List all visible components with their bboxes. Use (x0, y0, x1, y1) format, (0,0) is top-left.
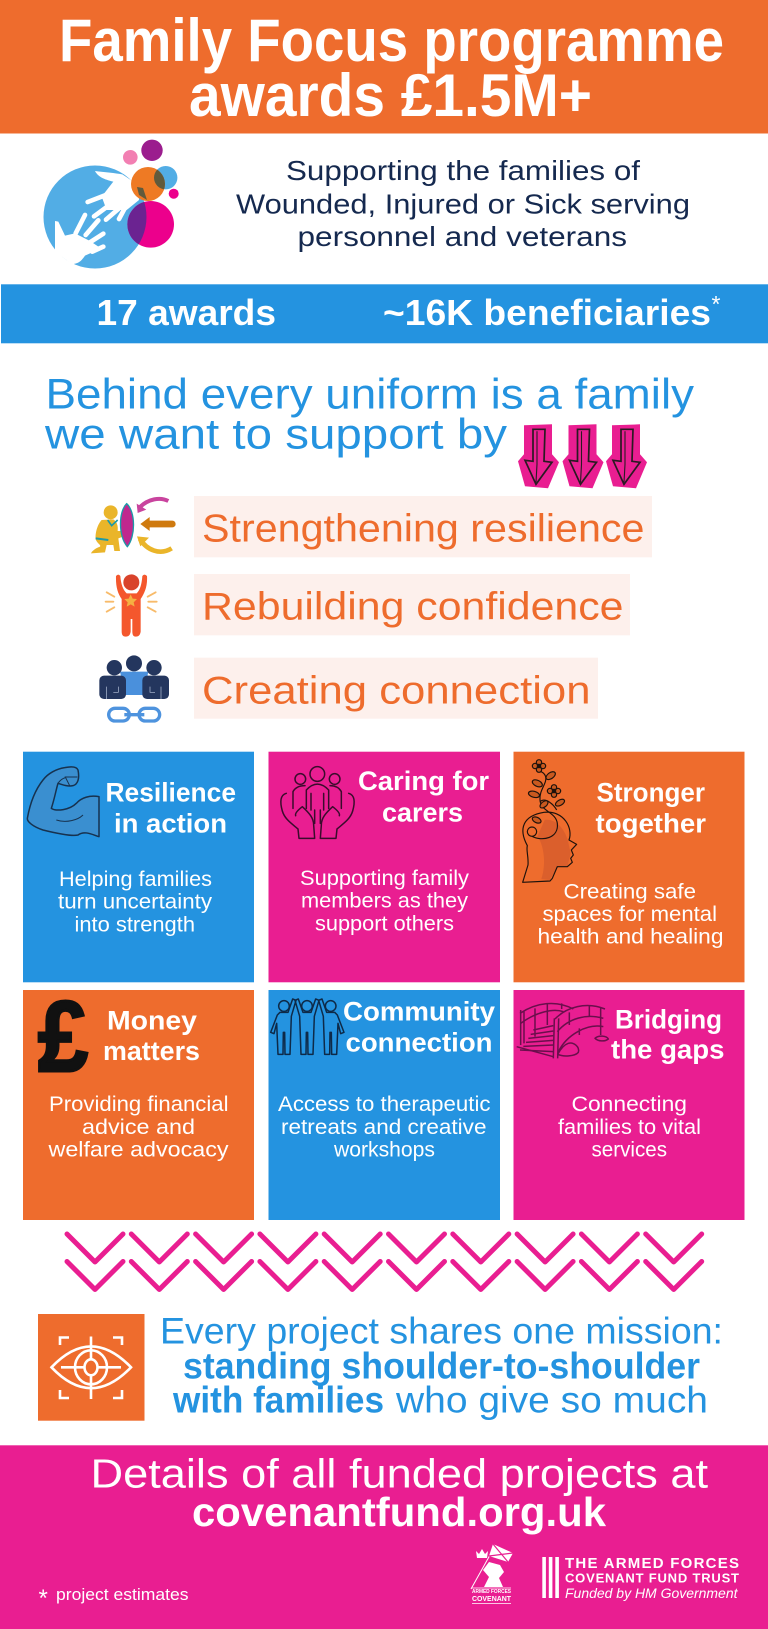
heading: connection (346, 1028, 492, 1058)
subtitle text: Supporting the families of (286, 155, 640, 186)
mission statement: who give so much (395, 1379, 708, 1420)
panel: bridging the gaps (514, 990, 744, 1220)
label: creating connection (194, 658, 598, 719)
call to action: Details of all funded projects at (90, 1450, 709, 1496)
chevrons divider (67, 1234, 702, 1290)
stat: awards: 17 awards (96, 292, 276, 333)
description: Access to therapeutic (278, 1093, 490, 1116)
label: strengthening resilience: Strengthening resilience (202, 508, 644, 551)
icon: hands holding people (281, 767, 354, 838)
title (59, 7, 724, 129)
description: into strength (74, 914, 195, 937)
subtitle text (236, 155, 690, 252)
footer panel (0, 1445, 768, 1629)
panel: stronger together (514, 752, 744, 982)
description: support others (315, 913, 454, 936)
intro heading: Behind every uniform is a family (46, 370, 695, 418)
heading (596, 778, 706, 839)
mission statement: with families (172, 1379, 384, 1420)
description: Providing financial (49, 1093, 228, 1116)
heading: Bridging (615, 1004, 722, 1034)
mission statement: standing shoulder-to-shoulder (183, 1345, 700, 1386)
description: retreats and creative (281, 1116, 486, 1139)
heading (343, 997, 495, 1058)
subtitle text: Wounded, Injured or Sick serving (236, 188, 690, 219)
icon: pound sign: £ (38, 981, 88, 1093)
intro heading (44, 370, 695, 458)
heading: matters (103, 1036, 200, 1066)
title: awards £1.5M+ (189, 62, 592, 129)
logo: armed forces covenant fund trust (542, 1555, 739, 1601)
logo: armed forces covenant (471, 1544, 513, 1604)
description (558, 1093, 701, 1162)
icon: flexed arm (27, 767, 99, 837)
intro heading: we want to support by (44, 410, 508, 458)
heading: Stronger (596, 778, 705, 808)
heading (103, 1005, 200, 1066)
heading: Caring for (358, 766, 489, 796)
call to action: covenantfund.org.uk (192, 1489, 606, 1535)
logo: armed forces covenant fund trust: COVENANT FUND TRUST (565, 1571, 739, 1586)
heading (611, 1004, 724, 1064)
subtitle text: personnel and veterans (298, 221, 627, 252)
description (300, 867, 470, 936)
panel: community connection (268, 990, 500, 1220)
description (47, 1093, 229, 1162)
heading: together (596, 809, 706, 839)
logo: armed forces covenant: ARMED FORCES (472, 1589, 512, 1595)
description: turn uncertainty (58, 890, 213, 913)
heading: the gaps (611, 1034, 724, 1064)
logo: hands and circles (44, 140, 179, 268)
description: health and healing (538, 925, 724, 948)
title: Family Focus programme (59, 7, 724, 74)
label: creating connection: Creating connection (202, 669, 590, 712)
description: Creating safe (564, 880, 696, 903)
icon: arched bridge (517, 1003, 608, 1058)
icon: resilience figure with shield (91, 499, 172, 553)
description (538, 880, 724, 948)
label: rebuilding confidence: Rebuilding confidence (202, 585, 624, 628)
description: workshops (333, 1139, 435, 1162)
description (58, 868, 213, 937)
panel: resilience in action (23, 752, 254, 982)
description: Supporting family (300, 867, 470, 890)
heading (106, 778, 236, 839)
icon: people with raised hands (271, 999, 344, 1054)
panel: money matters (23, 981, 254, 1220)
label: strengthening resilience (194, 496, 652, 557)
description: Connecting (572, 1093, 687, 1116)
description: spaces for mental (542, 903, 717, 926)
heading (358, 766, 489, 828)
panel: caring for carers (268, 752, 500, 982)
logo: armed forces covenant: COVENANT (472, 1594, 511, 1603)
icon: linked group of people (99, 655, 169, 721)
footnote: project estimates (56, 1585, 188, 1604)
header banner (0, 0, 768, 134)
description: welfare advocacy (47, 1139, 229, 1162)
footnote (38, 1585, 188, 1612)
icon: three pink down arrows (518, 424, 647, 488)
description: advice and (82, 1116, 195, 1139)
mission statement (160, 1310, 723, 1420)
stat: beneficiaries: ~16K beneficiaries (383, 292, 711, 333)
logo: armed forces covenant fund trust: Funded by HM Government (565, 1585, 739, 1601)
heading: Community (343, 997, 495, 1027)
description: Helping families (59, 868, 212, 891)
description (278, 1093, 490, 1162)
icon: eye target on orange square (38, 1314, 144, 1421)
heading: Money (107, 1005, 197, 1035)
heading: in action (114, 809, 227, 839)
heading: Resilience (106, 778, 236, 808)
description: members as they (301, 890, 469, 913)
stats band (1, 284, 768, 343)
label: rebuilding confidence (194, 574, 630, 635)
logo: armed forces covenant fund trust: THE ARMED FORCES (565, 1555, 739, 1572)
call to action (90, 1450, 709, 1535)
mission statement: Every project shares one mission: (160, 1310, 723, 1351)
asterisk: * (712, 291, 720, 317)
icon: head with growing flowers (523, 760, 577, 882)
description: services (592, 1139, 667, 1162)
description: families to vital (558, 1116, 701, 1139)
icon: confident person (106, 574, 157, 637)
footnote: * (38, 1585, 48, 1612)
heading: carers (382, 798, 463, 828)
